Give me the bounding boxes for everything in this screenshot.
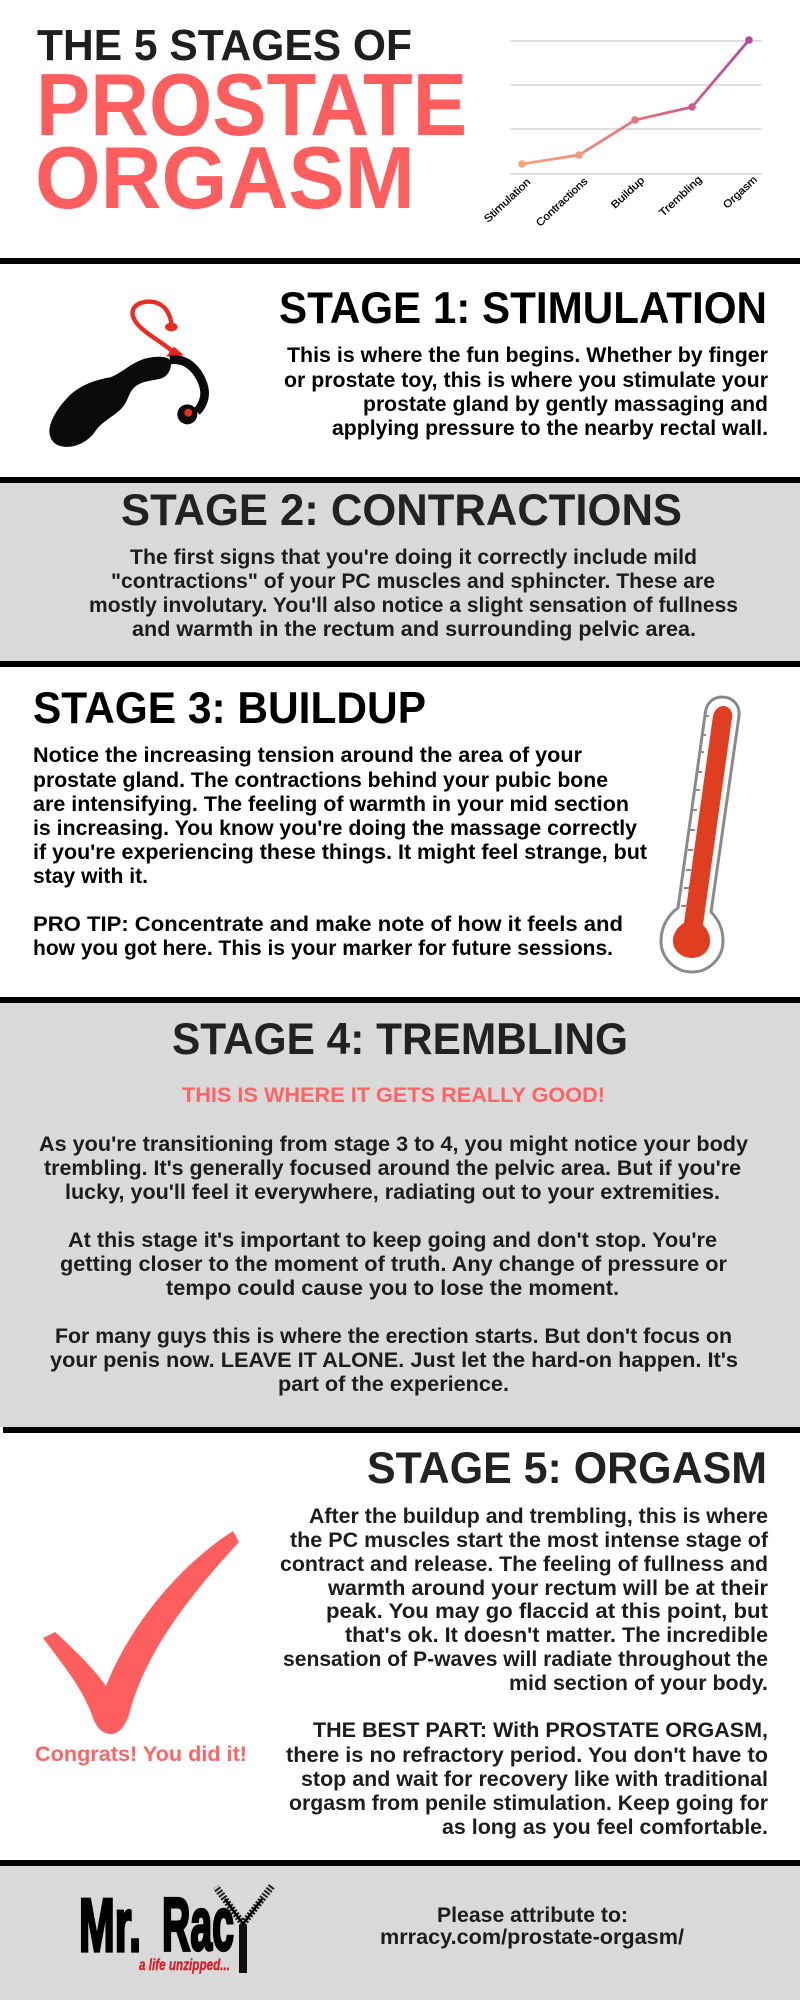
text block: pro tip (33, 913, 623, 960)
panel: footer attribution (0, 1866, 800, 2000)
logo: Mr. Racy: Rac (162, 1882, 234, 1966)
text block: the best part: orgasm from penile stimulation. Keep going for (289, 1792, 768, 1815)
panel: stage 4 trembling (0, 1003, 800, 1427)
text block: stage 5 body: contract and release. The feeling of fullness and (280, 1553, 768, 1576)
text block: pro tip: how you got here. This is your marker for future sessions. (33, 937, 613, 960)
text block: stage 5 body: the PC muscles start the most intense stage of (290, 1529, 769, 1552)
text block: stage 3 body: are intensifying. The feeling of warmth in your mid section (33, 793, 629, 816)
text block: the best part: THE BEST PART: With PROSTATE ORGASM, (313, 1719, 768, 1742)
text block: stage 3 body (33, 744, 647, 888)
text block: stage 4 paragraph 3: part of the experience. (278, 1373, 509, 1396)
logo: Mr. Racy: Mr. (79, 1883, 141, 1967)
text block: stage 4 paragraph 1: lucky, you'll feel it everywhere, radiating out to your extremities. (65, 1181, 720, 1204)
line chart: intensity by stage: Buildup (609, 174, 647, 211)
text block: stage 5 body: After the buildup and trembling, this is where (309, 1505, 768, 1528)
text block: stage 3 body: Notice the increasing tension around the area of your (33, 744, 582, 767)
text block: pro tip: PRO TIP: Concentrate and make note of how it feels and (33, 913, 623, 936)
heading: stage 3: STAGE 3: BUILDUP (33, 684, 426, 733)
text block: stage 1 body: or prostate toy, this is where you stimulate your (284, 369, 768, 392)
caption: congrats: Congrats! You did it! (35, 1743, 247, 1766)
text block: stage 5 body: sensation of P-waves will radiate throughout the (283, 1648, 768, 1671)
line chart: intensity by stage: Contractions (534, 175, 590, 229)
line chart: intensity by stage: Orgasm (721, 174, 760, 211)
line chart: intensity by stage (482, 36, 762, 229)
heading: stage 2: STAGE 2: CONTRACTIONS (121, 486, 682, 535)
heading: stage 5: STAGE 5: ORGASM (367, 1444, 767, 1493)
text block: stage 4 paragraph 2: At this stage it's important to keep going and don't stop. You're (68, 1229, 717, 1252)
text block: stage 5 body: peak. You may go flaccid at this point, but (326, 1600, 768, 1623)
text block: stage 2 body: The first signs that you're doing it correctly include mild (130, 546, 697, 569)
text block: stage 4 paragraph 2: tempo could cause you to lose the moment. (166, 1277, 619, 1300)
icon: thermometer (661, 697, 739, 972)
text block: stage 4 paragraph 1 (39, 1133, 748, 1204)
text block: stage 3 body: stay with it. (33, 865, 148, 888)
icon: check mark (43, 1531, 239, 1734)
subheading: gets really good: THIS IS WHERE IT GETS REALLY GOOD! (182, 1084, 605, 1107)
text block: stage 4 paragraph 1: trembling. It's generally focused around the pelvic area. But if you're (44, 1157, 741, 1180)
text block: stage 1 body (284, 344, 768, 440)
panel: stage 2 contractions (0, 483, 800, 661)
heading: stage 1: STAGE 1: STIMULATION (279, 284, 767, 333)
header title: THE 5 STAGES OF (37, 21, 412, 70)
text block: stage 2 body (89, 546, 738, 641)
line chart: intensity by stage: Trembling (657, 173, 705, 219)
text block: stage 4 paragraph 3: your penis now. LEAVE IT ALONE. Just let the hard-on happen. It's (50, 1349, 738, 1372)
text block: stage 1 body: prostate gland by gently massaging and (363, 393, 768, 416)
text block: stage 5 body (280, 1505, 769, 1695)
text block: stage 4 paragraph 3: For many guys this is where the erection starts. But don't focus on (55, 1325, 732, 1348)
text block: stage 2 body: and warmth in the rectum and surrounding pelvic area. (132, 618, 696, 641)
text block: attribution (380, 1904, 684, 1949)
text block: the best part: there is no refractory period. You don't have to (286, 1744, 768, 1767)
text block: the best part: as long as you feel comfortable. (442, 1816, 768, 1839)
header title: ORGASM (35, 128, 415, 227)
text block: stage 5 body: mid section of your body. (509, 1672, 768, 1695)
header title (35, 21, 467, 227)
text block: stage 5 body: that's ok. It doesn't matter. The incredible (345, 1624, 768, 1647)
text block: attribution: Please attribute to: (437, 1904, 628, 1927)
text block: stage 1 body: applying pressure to the nearby rectal wall. (332, 417, 768, 440)
text block: stage 4 paragraph 2: getting closer to the moment of truth. Any change of pressure or (60, 1253, 727, 1276)
text block: stage 2 body: "contractions" of your PC muscles and sphincter. These are (111, 570, 715, 593)
text block: stage 5 body: warmth around your rectum will be at their (327, 1577, 768, 1600)
line chart: intensity by stage: Stimulation (482, 176, 533, 225)
logo: Mr. Racy (79, 1882, 272, 1974)
logo: Mr. Racy: a life unzipped... (139, 1957, 230, 1974)
text block: attribution: mrracy.com/prostate-orgasm/ (380, 1926, 684, 1949)
panel: stage 1 stimulation (0, 264, 800, 477)
text block: stage 3 body: is increasing. You know you're doing the massage correctly (33, 817, 637, 840)
text block: stage 3 body: prostate gland. The contractions behind your pubic bone (33, 769, 608, 792)
header title: PROSTATE (36, 55, 467, 154)
heading: stage 4: STAGE 4: TREMBLING (172, 1015, 628, 1064)
panel: stage 5 orgasm (0, 1433, 800, 1860)
text block: stage 4 paragraph 1: As you're transitioning from stage 3 to 4, you might notice your body (39, 1133, 748, 1156)
text block: the best part (286, 1719, 768, 1839)
icon: prostate massager toy (49, 302, 205, 447)
text block: stage 2 body: mostly involutary. You'll also notice a slight sensation of fullness (89, 594, 738, 617)
text block: stage 3 body: if you're experiencing these things. It might feel strange, but (33, 841, 647, 864)
text block: stage 1 body: This is where the fun begins. Whether by finger (287, 344, 768, 367)
text block: stage 4 paragraph 2 (60, 1229, 727, 1300)
text block: stage 4 paragraph 3 (50, 1325, 738, 1396)
panel: stage 3 buildup (0, 667, 800, 997)
text block: the best part: stop and wait for recovery like with traditional (301, 1768, 768, 1791)
